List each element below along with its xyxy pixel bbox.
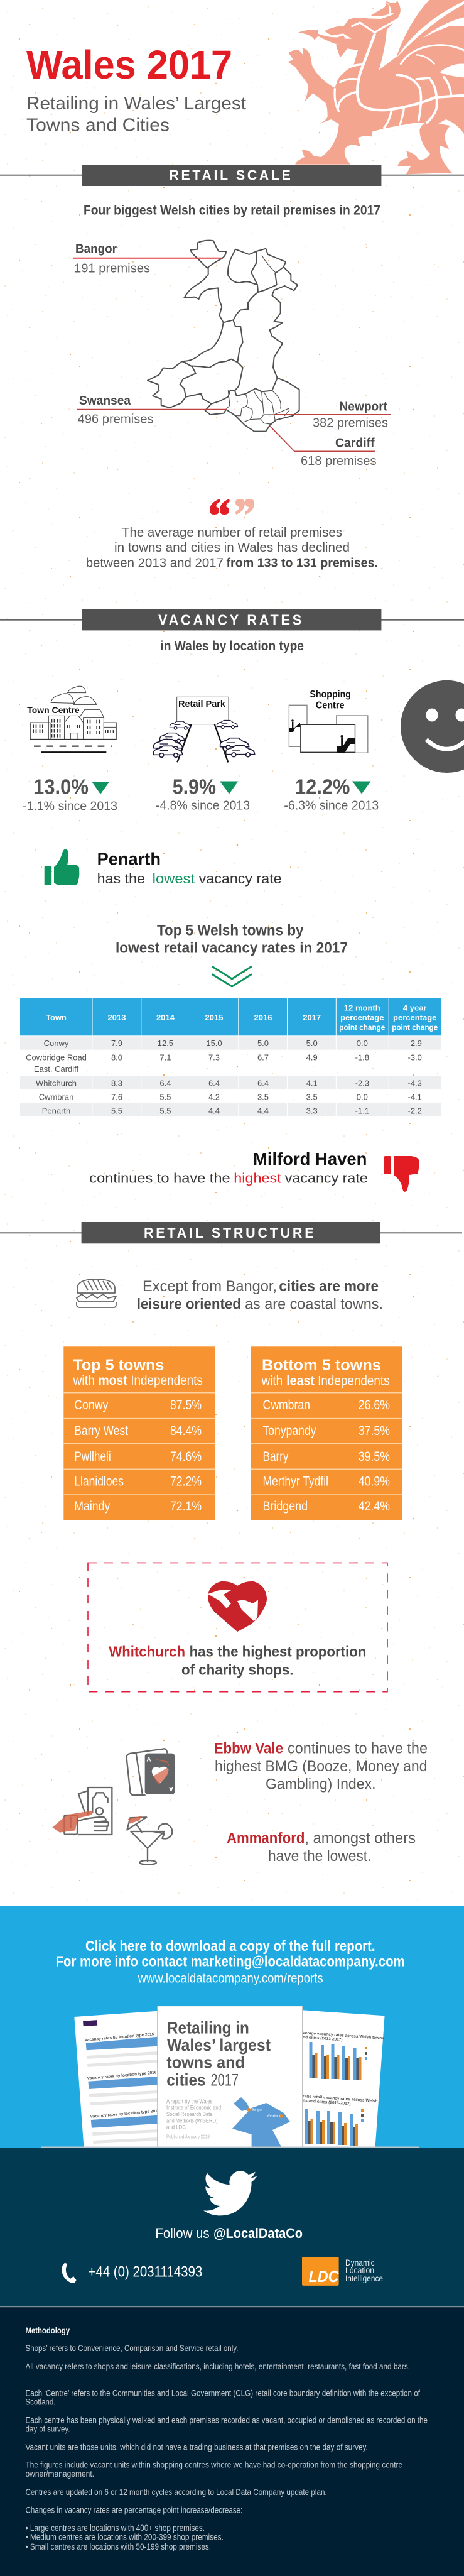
- table: lowest vacancy rates: 6.4: [208, 1078, 220, 1088]
- table: lowest vacancy rates: 6.4: [257, 1078, 269, 1088]
- report left page: Vacancy rates by location type 2016: [87, 2070, 157, 2081]
- text: follow us: @LocalDataCo: [213, 2225, 303, 2241]
- text: Ebbw Vale BMG: continues to have the: [288, 1740, 428, 1757]
- panel: methodology: • Large centres are locations with 400+ shop premises.: [25, 2523, 205, 2533]
- callout: Penarth lowest vacancy: has the: [97, 871, 145, 887]
- panel: top 5 independents: Llanidloes: [74, 1474, 124, 1489]
- stat: town centre: -1.1% since 2013: [23, 799, 117, 813]
- label: Swansea: Swansea: [79, 394, 131, 408]
- icon: phone: [62, 2263, 77, 2283]
- report right page: nd cities (2013-2017): [303, 2035, 343, 2042]
- report cover: Bangor: [252, 2109, 262, 2112]
- report right page: [303, 2010, 385, 2147]
- text: average number of premises: from 133 to 131 premises.: [226, 556, 378, 570]
- report cover: Wales’ largest: [167, 2036, 271, 2055]
- report right page: rage retail vacancy rates across Welsh: [303, 2094, 378, 2104]
- report cover: Retailing in: [167, 2019, 249, 2038]
- icon: thumbs down: [384, 1156, 419, 1192]
- stat: town centre: [23, 775, 117, 813]
- panel: top 5 independents: 87.5%: [170, 1398, 202, 1412]
- text: phone number: +44 (0) 2031114393: [88, 2263, 202, 2281]
- report cover: Institute of Economic and: [166, 2105, 221, 2112]
- label: Newport: Newport: [339, 400, 387, 413]
- panel: methodology: day of survey.: [25, 2424, 70, 2434]
- panel: bottom 5 independents: Tonypandy: [262, 1424, 316, 1438]
- table: lowest vacancy rates: -1.8: [355, 1052, 369, 1062]
- panel: social and contact: [0, 2148, 464, 2307]
- panel: top 5 independents: most: [98, 1373, 127, 1388]
- text: leisure oriented: [137, 1278, 383, 1313]
- report cover: A report by the Wales: [166, 2098, 213, 2105]
- icon: shopping centre: [289, 705, 368, 753]
- subtitle: Retailing in Wales’ Largest: [26, 94, 246, 114]
- report cover: and LDC: [166, 2124, 186, 2131]
- table: lowest vacancy rates: -4.3: [407, 1078, 422, 1088]
- text: leisure oriented: Except from Bangor,: [143, 1278, 277, 1295]
- panel: top 5 independents: 84.4%: [170, 1424, 202, 1438]
- heading: top 5 lowest vacancy: [116, 922, 348, 957]
- logo: LDC: [302, 2257, 383, 2286]
- panel: bottom 5 independents: 37.5%: [359, 1424, 390, 1438]
- report cover: Wrexham: [267, 2115, 280, 2119]
- map of Wales: [148, 241, 299, 432]
- section heading: vacancy rates: [0, 609, 464, 630]
- panel: methodology: owner/management.: [25, 2469, 94, 2479]
- label: Newport: 382 premises: [313, 416, 388, 430]
- panel: top 5 independents: with: [72, 1373, 95, 1388]
- panel: top 5 independents: Pwllheli: [74, 1449, 111, 1464]
- table: lowest vacancy rates: 12 month: [344, 1003, 380, 1012]
- panel: top 5 independents: Conwy: [74, 1398, 109, 1412]
- table: lowest vacancy rates: point change: [339, 1022, 385, 1032]
- text: Whitchurch charity shops: of charity shops.: [181, 1661, 294, 1678]
- panel: bottom 5 independents: Independents: [318, 1374, 390, 1389]
- text: Ebbw Vale BMG: highest BMG (Booze, Money and: [215, 1758, 427, 1775]
- table: lowest vacancy rates: 5.0: [257, 1039, 269, 1048]
- callout: Milford Haven highest vacancy: continues to have the: [89, 1171, 230, 1186]
- label: Cardiff: Cardiff: [335, 436, 375, 450]
- callout: Milford Haven highest vacancy: vacancy rate: [285, 1171, 368, 1186]
- icon: playing cards: [127, 1749, 175, 1795]
- panel: bottom 5 independents: least: [286, 1374, 315, 1389]
- panel: methodology: Methodology: [25, 2325, 70, 2335]
- panel: methodology: Vacant units are those units, which did not have a trading business at that premises on the day of survey.: [25, 2442, 368, 2452]
- text: Ammanford lowest: [227, 1830, 416, 1865]
- icon: playing cards: A: [169, 1785, 173, 1792]
- icon: heart with hands: [208, 1581, 267, 1632]
- table: lowest vacancy rates: [20, 998, 441, 1116]
- label: Newport: [274, 400, 391, 430]
- panel: top 5 independents: Maindy: [74, 1499, 111, 1514]
- callout: Milford Haven highest vacancy: Milford Haven: [253, 1149, 367, 1169]
- table: lowest vacancy rates: 2017: [303, 1013, 321, 1022]
- icon: burger: [77, 1279, 116, 1307]
- label: Swansea: [77, 394, 227, 426]
- callout: Penarth lowest vacancy: lowest: [153, 871, 195, 887]
- panel: bottom 5 independents: Cwmbran: [262, 1398, 310, 1412]
- logo: LDC: Location: [345, 2266, 374, 2275]
- icon: playing cards: A: [146, 1756, 151, 1763]
- stat: retail park: 5.9%: [173, 775, 216, 798]
- table: lowest vacancy rates: 3.5: [306, 1093, 318, 1102]
- table: lowest vacancy rates: 6.4: [159, 1078, 171, 1088]
- panel: bottom 5 independents: Barry: [262, 1449, 289, 1464]
- table: lowest vacancy rates: Conwy: [44, 1039, 69, 1048]
- text: leisure oriented: as are coastal towns.: [245, 1296, 383, 1313]
- icon: cocktail: [127, 1816, 172, 1865]
- panel: top 5 independents: [63, 1346, 215, 1520]
- panel: methodology: • Small centres are locations with 50-199 shop premises.: [25, 2542, 211, 2551]
- table: lowest vacancy rates: 5.5: [111, 1106, 122, 1116]
- report cover: [158, 2006, 303, 2147]
- title: Wales 2017: [26, 42, 232, 87]
- panel: bottom 5 independents: Bridgend: [262, 1499, 308, 1514]
- icon: twitter bird: [203, 2171, 257, 2215]
- table: lowest vacancy rates: 4 year: [403, 1003, 426, 1012]
- table: lowest vacancy rates: point change: [392, 1022, 438, 1032]
- label: shopping centre: [310, 689, 351, 711]
- section heading: retail scale: [0, 165, 464, 186]
- panel: bottom 5 independents: 39.5%: [359, 1449, 390, 1464]
- report left page: Vacancy rates by location type 2015: [85, 2032, 154, 2043]
- panel: charity shops callout: [88, 1563, 387, 1692]
- table: lowest vacancy rates: 3.5: [257, 1093, 269, 1102]
- report left page: Vacancy rates by location type 2013: [90, 2109, 160, 2119]
- report cover: cities: [166, 2070, 206, 2089]
- icon: town centre: [30, 686, 116, 752]
- section heading: vacancy rates: VACANCY RATES: [158, 611, 304, 628]
- subtitle: [26, 94, 246, 136]
- text: Ebbw Vale BMG: Ebbw Vale: [214, 1740, 283, 1757]
- table: lowest vacancy rates: 0.0: [357, 1093, 368, 1102]
- text: Ammanford lowest: Ammanford: [227, 1830, 305, 1847]
- panel: bottom 5 independents: Bottom 5 towns: [262, 1356, 381, 1374]
- label: Swansea: 496 premises: [78, 412, 153, 426]
- label: Cardiff: 618 premises: [301, 454, 377, 468]
- panel: top 5 independents: Top 5 towns: [73, 1356, 164, 1374]
- icon: smiley: [401, 680, 464, 773]
- panel: bottom 5 independents: [251, 1346, 402, 1520]
- table: lowest vacancy rates: -1.1: [355, 1106, 369, 1116]
- stat: town centre: 13.0%: [33, 775, 89, 798]
- text: download call to action: [56, 1938, 405, 1986]
- label: Cardiff: [270, 426, 377, 468]
- text: leisure oriented: cities are more: [279, 1278, 379, 1295]
- table: lowest vacancy rates: East, Cardiff: [34, 1064, 79, 1074]
- table: lowest vacancy rates: Cwmbran: [39, 1093, 73, 1102]
- table: lowest vacancy rates: 2014: [156, 1013, 175, 1022]
- table: lowest vacancy rates: 4.2: [208, 1093, 220, 1102]
- report left page: [74, 2011, 160, 2147]
- report cover: 2017: [211, 2070, 239, 2089]
- logo: LDC: LDC: [309, 2267, 340, 2286]
- panel: methodology: Changes in vacancy rates are percentage point increase/decrease:: [25, 2506, 242, 2515]
- panel: methodology: [0, 2306, 464, 2576]
- table: lowest vacancy rates: -3.0: [407, 1052, 422, 1062]
- icon: thumbs up: [45, 849, 79, 885]
- panel: methodology: Centres are updated on 6 or 12 month cycles according to Local Data Company update plan.: [25, 2487, 327, 2497]
- report cover: towns and: [166, 2053, 245, 2072]
- text: average number of premises: between 2013 and 2017: [86, 556, 224, 570]
- text: Ebbw Vale BMG: [214, 1740, 428, 1793]
- panel: top 5 independents: Barry West: [74, 1424, 128, 1438]
- text: download call to action: www.localdatacompany.com/reports: [138, 1972, 323, 1986]
- panel: top 5 independents: Independents: [131, 1373, 203, 1388]
- panel: methodology: • Medium centres are locations with 200-399 shop premises.: [25, 2532, 224, 2542]
- text: Whitchurch charity shops: [109, 1643, 366, 1678]
- stat: shopping centre: 12.2%: [295, 775, 350, 798]
- table: lowest vacancy rates: -4.1: [407, 1093, 422, 1102]
- label: retail park: Retail Park: [178, 699, 226, 709]
- text: Ammanford lowest: , amongst others: [305, 1830, 416, 1847]
- text: Whitchurch charity shops: Whitchurch: [109, 1643, 185, 1659]
- report right page: ns and cities (2013-2017): [303, 2098, 351, 2106]
- report cover: Social Research Data: [166, 2111, 213, 2118]
- table: lowest vacancy rates: -2.3: [355, 1078, 369, 1088]
- table: lowest vacancy rates: 2015: [205, 1013, 223, 1022]
- text: average number of premises: [86, 525, 378, 570]
- stat: retail park: -4.8% since 2013: [156, 799, 250, 813]
- stat: retail park: [156, 775, 250, 813]
- panel: bottom 5 independents: 26.6%: [359, 1398, 390, 1412]
- text: follow us: Follow us: [155, 2225, 210, 2241]
- table: lowest vacancy rates: 7.6: [111, 1093, 122, 1102]
- table: lowest vacancy rates: 7.9: [111, 1039, 122, 1048]
- table: lowest vacancy rates: 6.7: [257, 1052, 269, 1062]
- label: Bangor: 191 premises: [74, 261, 150, 275]
- table: lowest vacancy rates: 4.1: [306, 1078, 318, 1088]
- table: lowest vacancy rates: -2.2: [407, 1106, 422, 1116]
- panel: bottom 5 independents: 42.4%: [359, 1499, 390, 1514]
- label: Bangor: Bangor: [75, 243, 117, 256]
- label: town centre: Town Centre: [27, 705, 80, 715]
- table: lowest vacancy rates: 5.5: [159, 1106, 171, 1116]
- heading: top 5 lowest vacancy: lowest retail vacancy rates in 2017: [116, 940, 348, 957]
- table: lowest vacancy rates: percentage: [393, 1013, 436, 1022]
- icon: double chevron: [212, 966, 252, 986]
- callout: Milford Haven highest vacancy: [89, 1149, 368, 1186]
- text: download call to action: Click here to download a copy of the full report.: [85, 1938, 375, 1954]
- label: shopping centre: Shopping: [310, 689, 351, 700]
- table: lowest vacancy rates: 2013: [108, 1013, 126, 1022]
- label: shopping centre: Centre: [316, 700, 345, 711]
- heading: top 5 lowest vacancy: Top 5 Welsh towns by: [157, 922, 304, 939]
- table: lowest vacancy rates: 8.3: [111, 1078, 122, 1088]
- table: lowest vacancy rates: 15.0: [206, 1039, 222, 1048]
- panel: methodology: Scotland.: [25, 2398, 55, 2407]
- subheading: by location type: in Wales by location type: [160, 639, 304, 653]
- text: Whitchurch charity shops: has the highest proportion: [190, 1643, 366, 1659]
- callout: Penarth lowest vacancy: vacancy rate: [199, 871, 282, 887]
- table: lowest vacancy rates: 4.4: [208, 1106, 220, 1116]
- text: leisure oriented: leisure oriented: [137, 1296, 241, 1313]
- table: lowest vacancy rates: 8.0: [111, 1052, 122, 1062]
- icon: Welsh dragon: [288, 0, 464, 174]
- panel: methodology: All vacancy refers to shops and leisure classifications, including hotels, entertainment, restaurants, fast food and bars.: [25, 2362, 410, 2371]
- label: Bangor: [73, 243, 222, 275]
- panel: bottom 5 independents: Merthyr Tydfil: [262, 1474, 328, 1489]
- panel: top 5 independents: 74.6%: [170, 1449, 202, 1464]
- panel: download report: [0, 1906, 464, 2148]
- text: download call to action: For more info contact marketing@localdatacompany.com: [56, 1953, 405, 1969]
- stat: shopping centre: [284, 775, 379, 813]
- text: Ammanford lowest: have the lowest.: [268, 1848, 371, 1865]
- panel: top 5 independents: 72.1%: [170, 1499, 202, 1514]
- section heading: retail structure: RETAIL STRUCTURE: [144, 1225, 316, 1241]
- table: lowest vacancy rates: 4.9: [306, 1052, 318, 1062]
- logo: LDC: Dynamic: [345, 2258, 375, 2268]
- table: lowest vacancy rates: Whitchurch: [36, 1078, 77, 1088]
- table: lowest vacancy rates: 3.3: [306, 1106, 318, 1116]
- text: Ebbw Vale BMG: Gambling) Index.: [266, 1776, 375, 1793]
- table: lowest vacancy rates: 7.1: [159, 1052, 171, 1062]
- report cover: Published January 2018: [166, 2134, 210, 2139]
- subtitle: Towns and Cities: [26, 116, 170, 136]
- table: lowest vacancy rates: 0.0: [357, 1039, 368, 1048]
- report cover: and Methods (WISERD): [166, 2117, 217, 2124]
- text: follow us: [155, 2225, 303, 2241]
- icon: retail park: [154, 697, 255, 762]
- panel: methodology: Shops’ refers to Convenience, Comparison and Service retail only.: [25, 2344, 238, 2353]
- table: lowest vacancy rates: percentage: [340, 1013, 384, 1022]
- table: lowest vacancy rates: -2.9: [407, 1039, 422, 1048]
- section heading: retail structure: [0, 1222, 462, 1243]
- section heading: retail scale: RETAIL SCALE: [170, 167, 293, 183]
- table: lowest vacancy rates: 2016: [254, 1013, 272, 1022]
- text: average number of premises: The average number of retail premises: [122, 525, 342, 540]
- table: lowest vacancy rates: 5.5: [159, 1093, 171, 1102]
- stat: shopping centre: -6.3% since 2013: [284, 799, 379, 813]
- panel: methodology: The figures include vacant units within shopping centres where we have had co-operation from the shopping centre: [25, 2460, 402, 2470]
- logo: LDC: Intelligence: [345, 2274, 383, 2283]
- report right page: verage vacancy rates across Welsh towns: [303, 2031, 384, 2041]
- panel: top 5 independents: 72.2%: [170, 1474, 202, 1489]
- panel: bottom 5 independents: 40.9%: [359, 1474, 390, 1489]
- callout: Penarth lowest vacancy: [97, 849, 282, 887]
- callout: Milford Haven highest vacancy: highest: [234, 1171, 281, 1186]
- table: lowest vacancy rates: 7.3: [208, 1052, 220, 1062]
- table: lowest vacancy rates: 4.4: [257, 1106, 269, 1116]
- text: average number of premises: in towns and cities in Wales has declined: [114, 540, 350, 555]
- icon: quotation marks: [210, 499, 254, 515]
- table: lowest vacancy rates: Penarth: [42, 1106, 70, 1116]
- table: lowest vacancy rates: Cowbridge Road: [26, 1052, 87, 1062]
- table: lowest vacancy rates: 12.5: [158, 1039, 173, 1048]
- callout: Penarth lowest vacancy: Penarth: [97, 849, 161, 869]
- heading: four biggest cities: Four biggest Welsh cities by retail premises in 2017: [84, 204, 380, 218]
- panel: bottom 5 independents: with: [261, 1374, 283, 1389]
- icon: money in hand: [52, 1787, 112, 1835]
- table: lowest vacancy rates: 5.0: [306, 1039, 318, 1048]
- table: lowest vacancy rates: Town: [46, 1013, 67, 1022]
